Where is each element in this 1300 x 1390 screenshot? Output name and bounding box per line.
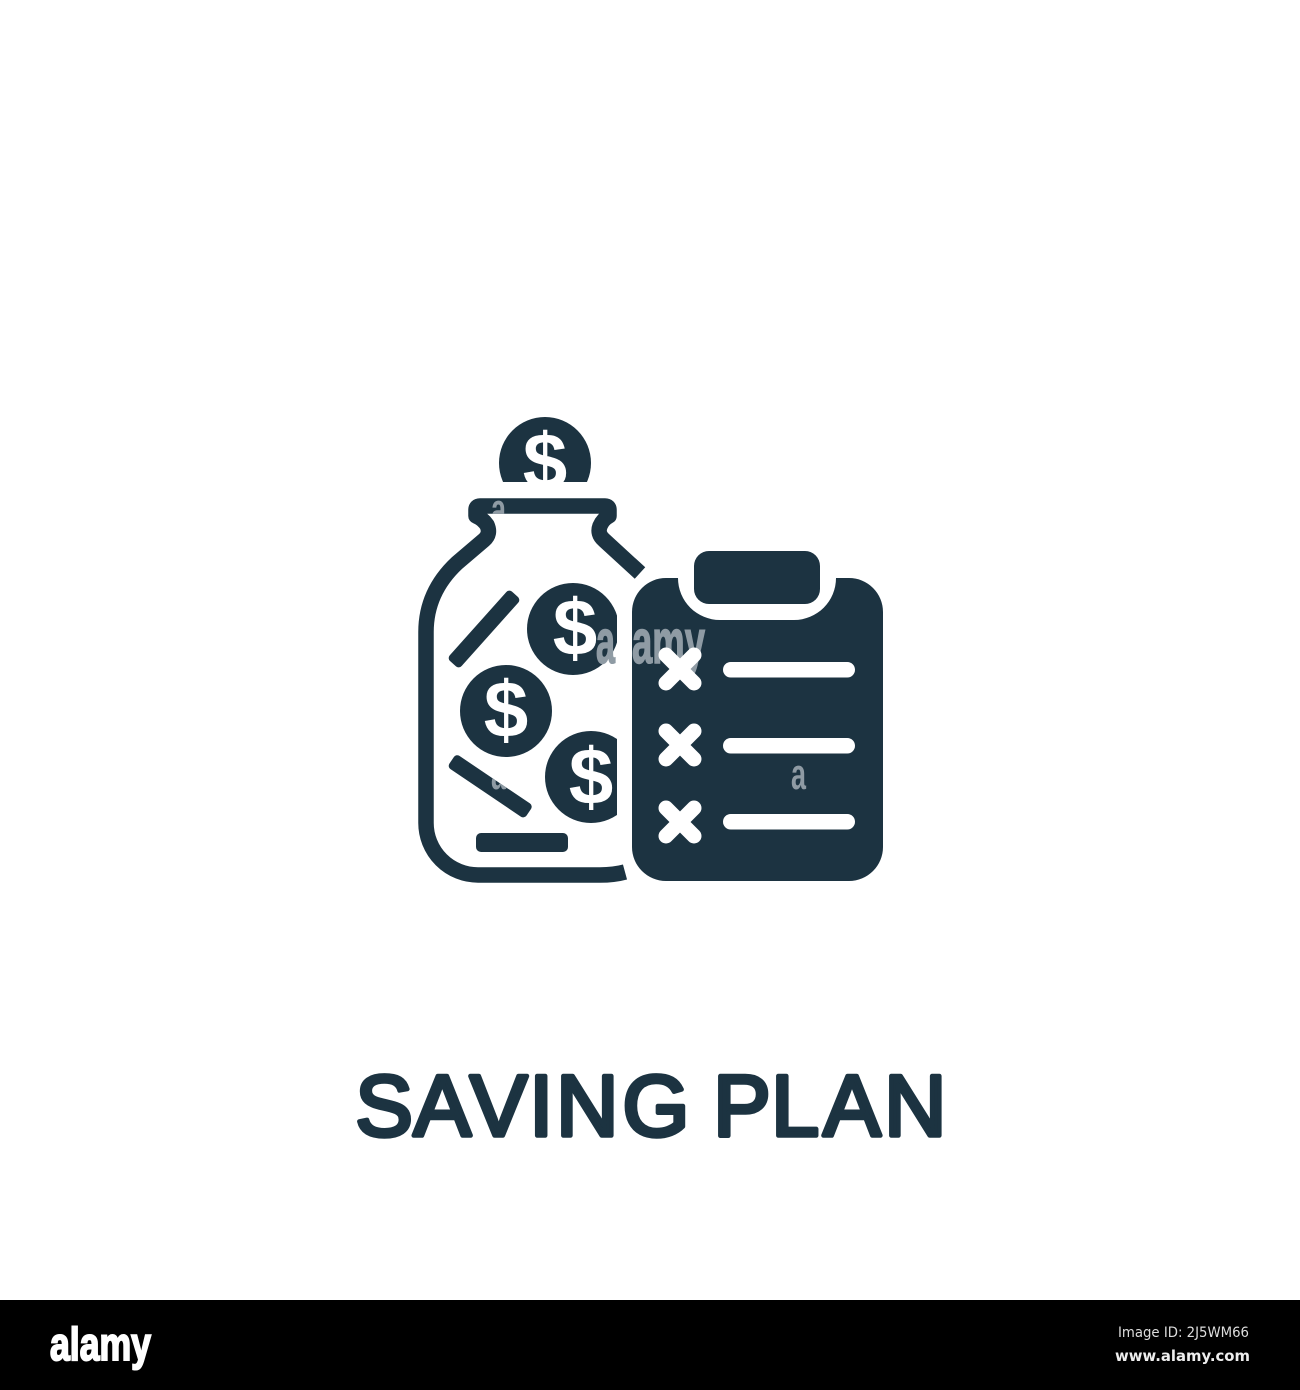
watermark: small letters: a [791,750,806,799]
icon: clipboard board [632,578,883,881]
icon: coins in jar: $ [484,665,528,754]
watermark: small letters: a [491,750,506,799]
title: SAVING PLAN [355,1058,946,1154]
watermark: alamy [596,608,705,677]
icon: coin seen edge-on, lower [447,754,533,819]
watermark: small letters [491,485,806,799]
watermark: small letters: a [491,485,506,534]
footer logo: alamy [50,1318,151,1370]
icon: checklist lines [723,662,855,830]
icon: checklist crosses [666,655,694,836]
image id: Image ID: 2J5WM66 [1118,1325,1249,1341]
icon: coin seen edge-on, upper [447,589,521,669]
icon: coins in jar: $ [553,583,597,672]
icon: saving plan [426,417,883,881]
watermark: alamy: a [596,608,615,677]
icon: coins in jar: $ [569,732,613,821]
icon: coin seen edge-on, bottom [476,833,568,852]
watermark: alamy: amy [632,608,705,677]
icon: jar outline [426,506,640,875]
website: www.alamy.com [1115,1347,1250,1365]
footer bar [0,1300,1300,1390]
icon: falling coin [499,417,591,482]
icon: falling coin: $ [523,417,567,506]
icon: coins in jar [460,583,617,823]
icon: clipboard clip [694,551,820,604]
